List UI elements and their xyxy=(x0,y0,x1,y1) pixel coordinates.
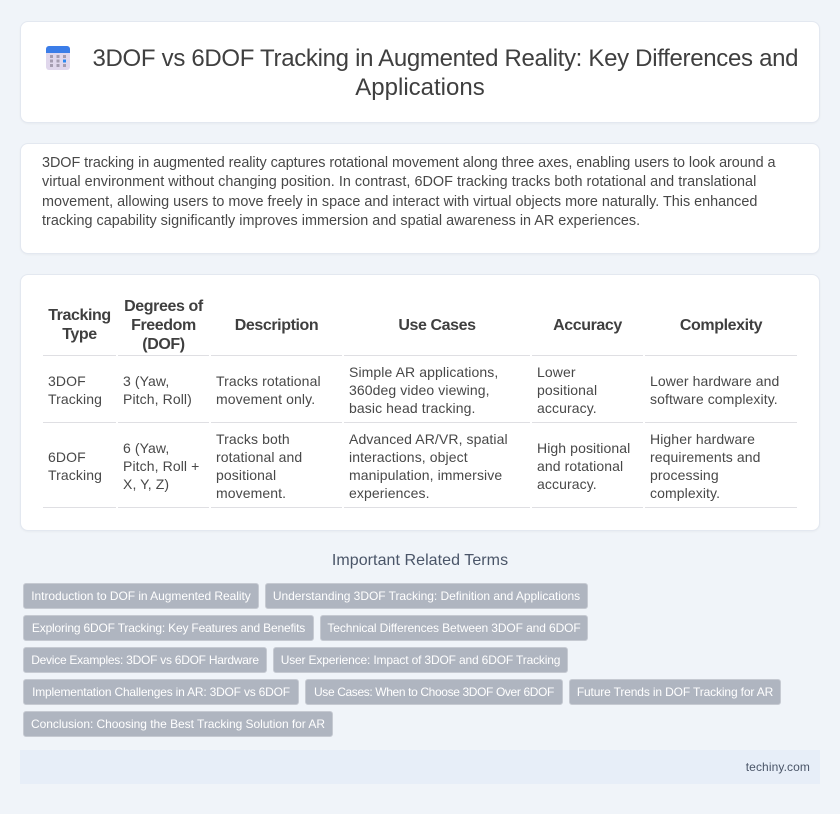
tag: Technical Differences Between 3DOF and 6DOF xyxy=(327,621,581,635)
row: 6DOF type xyxy=(48,449,102,483)
row: 6DOF accuracy: and rotational xyxy=(537,458,623,474)
tag: Use Cases: When to Choose 3DOF Over 6DOF xyxy=(314,685,554,699)
footer bar xyxy=(20,750,820,784)
row: 6DOF accuracy: accuracy. xyxy=(537,476,597,492)
intro text: tracking capability significantly improves immersion and spatial awareness in AR experiences. xyxy=(42,213,640,229)
title line one: 3DOF vs 6DOF Tracking in Augmented Reality: Key Differences and xyxy=(92,45,798,72)
row: 6DOF type: Tracking xyxy=(48,467,102,483)
row: 3DOF use cases: 360deg video viewing, xyxy=(349,382,490,398)
tag xyxy=(265,583,588,609)
row: 3DOF degrees: 3 (Yaw, xyxy=(123,373,169,389)
row: 6DOF description: rotational and xyxy=(216,449,302,465)
row: 3DOF use cases: Simple AR applications, xyxy=(349,364,498,380)
header: degrees of freedom: (DOF) xyxy=(142,336,185,353)
intro text xyxy=(42,155,776,229)
panel: intro xyxy=(20,143,820,254)
header: use cases: Use Cases xyxy=(398,317,476,334)
row: 6DOF complexity: processing xyxy=(650,467,719,483)
tag: Conclusion: Choosing the Best Tracking Solution for AR xyxy=(31,717,325,731)
related term tags xyxy=(23,583,781,737)
tag xyxy=(320,615,588,641)
row: 6DOF complexity: Higher hardware xyxy=(650,431,755,447)
header: tracking type: Tracking xyxy=(48,307,111,324)
row: 6DOF complexity: requirements and xyxy=(650,449,761,465)
row: 3DOF complexity: software complexity. xyxy=(650,391,778,407)
tag: Understanding 3DOF Tracking: Definition and Applications xyxy=(273,589,580,603)
row: 6DOF accuracy: High positional xyxy=(537,440,630,456)
header: degrees of freedom: Degrees of xyxy=(124,298,203,315)
panel: comparison table xyxy=(20,274,820,531)
row: 6DOF degrees: Pitch, Roll + xyxy=(123,458,199,474)
tag xyxy=(273,647,568,673)
intro text: virtual environment without changing position. In contrast, 6DOF tracking tracks both rotational and translational xyxy=(42,174,756,190)
tag: Introduction to DOF in Augmented Reality xyxy=(31,589,251,603)
row: 3DOF complexity: Lower hardware and xyxy=(650,373,779,389)
tag xyxy=(23,647,267,673)
row: 3DOF description xyxy=(216,373,321,407)
row: 6DOF description xyxy=(216,431,302,501)
header: degrees of freedom xyxy=(124,298,204,353)
header: accuracy: Accuracy xyxy=(553,317,622,334)
row: 3DOF accuracy: Lower xyxy=(537,364,576,380)
row: 3DOF type: Tracking xyxy=(48,391,102,407)
row: 6DOF description: positional xyxy=(216,467,276,483)
header: description: Description xyxy=(235,317,318,334)
row: 6DOF use cases: interactions, object xyxy=(349,449,468,465)
row: 3DOF degrees xyxy=(123,373,192,407)
header: tracking type xyxy=(48,307,111,343)
header: degrees of freedom: Freedom xyxy=(131,317,196,334)
row: 6DOF description: movement. xyxy=(216,485,286,501)
tag: Implementation Challenges in AR: 3DOF vs 6DOF xyxy=(32,685,290,699)
header: tracking type: Type xyxy=(62,326,97,343)
tag xyxy=(23,615,314,641)
tag xyxy=(23,583,259,609)
tag: Exploring 6DOF Tracking: Key Features and Benefits xyxy=(32,621,305,635)
row: 3DOF description: movement only. xyxy=(216,391,315,407)
intro text: movement, allowing users to move freely in space and interact with virtual objects more naturally. This enhanced xyxy=(42,194,757,210)
tag xyxy=(23,679,299,705)
tag xyxy=(569,679,781,705)
row: 6DOF type: 6DOF xyxy=(48,449,86,465)
row: 6DOF accuracy xyxy=(537,440,630,492)
row: 6DOF complexity xyxy=(650,431,761,501)
header: complexity: Complexity xyxy=(680,317,762,334)
intro text: 3DOF tracking in augmented reality captures rotational movement along three axes, enabling users to look around a xyxy=(42,155,776,171)
row: 3DOF description: Tracks rotational xyxy=(216,373,321,389)
row: 3DOF accuracy: accuracy. xyxy=(537,400,597,416)
row: 3DOF complexity xyxy=(650,373,779,407)
panel: header xyxy=(20,21,820,123)
footer credit: techiny.com xyxy=(746,760,810,774)
row: 3DOF accuracy: positional xyxy=(537,382,597,398)
row: 6DOF complexity: complexity. xyxy=(650,485,720,501)
row: 6DOF use cases: Advanced AR/VR, spatial xyxy=(349,431,508,447)
tag: Future Trends in DOF Tracking for AR xyxy=(577,685,773,699)
row: 6DOF degrees: 6 (Yaw, xyxy=(123,440,169,456)
row: 6DOF use cases xyxy=(349,431,508,501)
row: 3DOF degrees: Pitch, Roll) xyxy=(123,391,192,407)
row: 6DOF use cases: experiences. xyxy=(349,485,430,501)
tag: Device Examples: 3DOF vs 6DOF Hardware xyxy=(31,653,259,667)
title line two: Applications xyxy=(355,74,485,101)
row: 3DOF type xyxy=(48,373,102,407)
row: 3DOF type: 3DOF xyxy=(48,373,86,389)
row: 3DOF use cases: basic head tracking. xyxy=(349,400,476,416)
title xyxy=(92,45,798,101)
icon: calendar grid xyxy=(46,46,70,70)
row: 6DOF degrees xyxy=(123,440,199,492)
row: 6DOF degrees: X, Y, Z) xyxy=(123,476,169,492)
tag: User Experience: Impact of 3DOF and 6DOF Tracking xyxy=(281,653,560,667)
row: 6DOF description: Tracks both xyxy=(216,431,290,447)
row: 3DOF use cases xyxy=(349,364,498,416)
heading: related terms: Important Related Terms xyxy=(332,552,508,569)
tag xyxy=(23,711,333,737)
row: 6DOF use cases: manipulation, immersive xyxy=(349,467,502,483)
row: 3DOF accuracy xyxy=(537,364,597,416)
tag xyxy=(305,679,563,705)
